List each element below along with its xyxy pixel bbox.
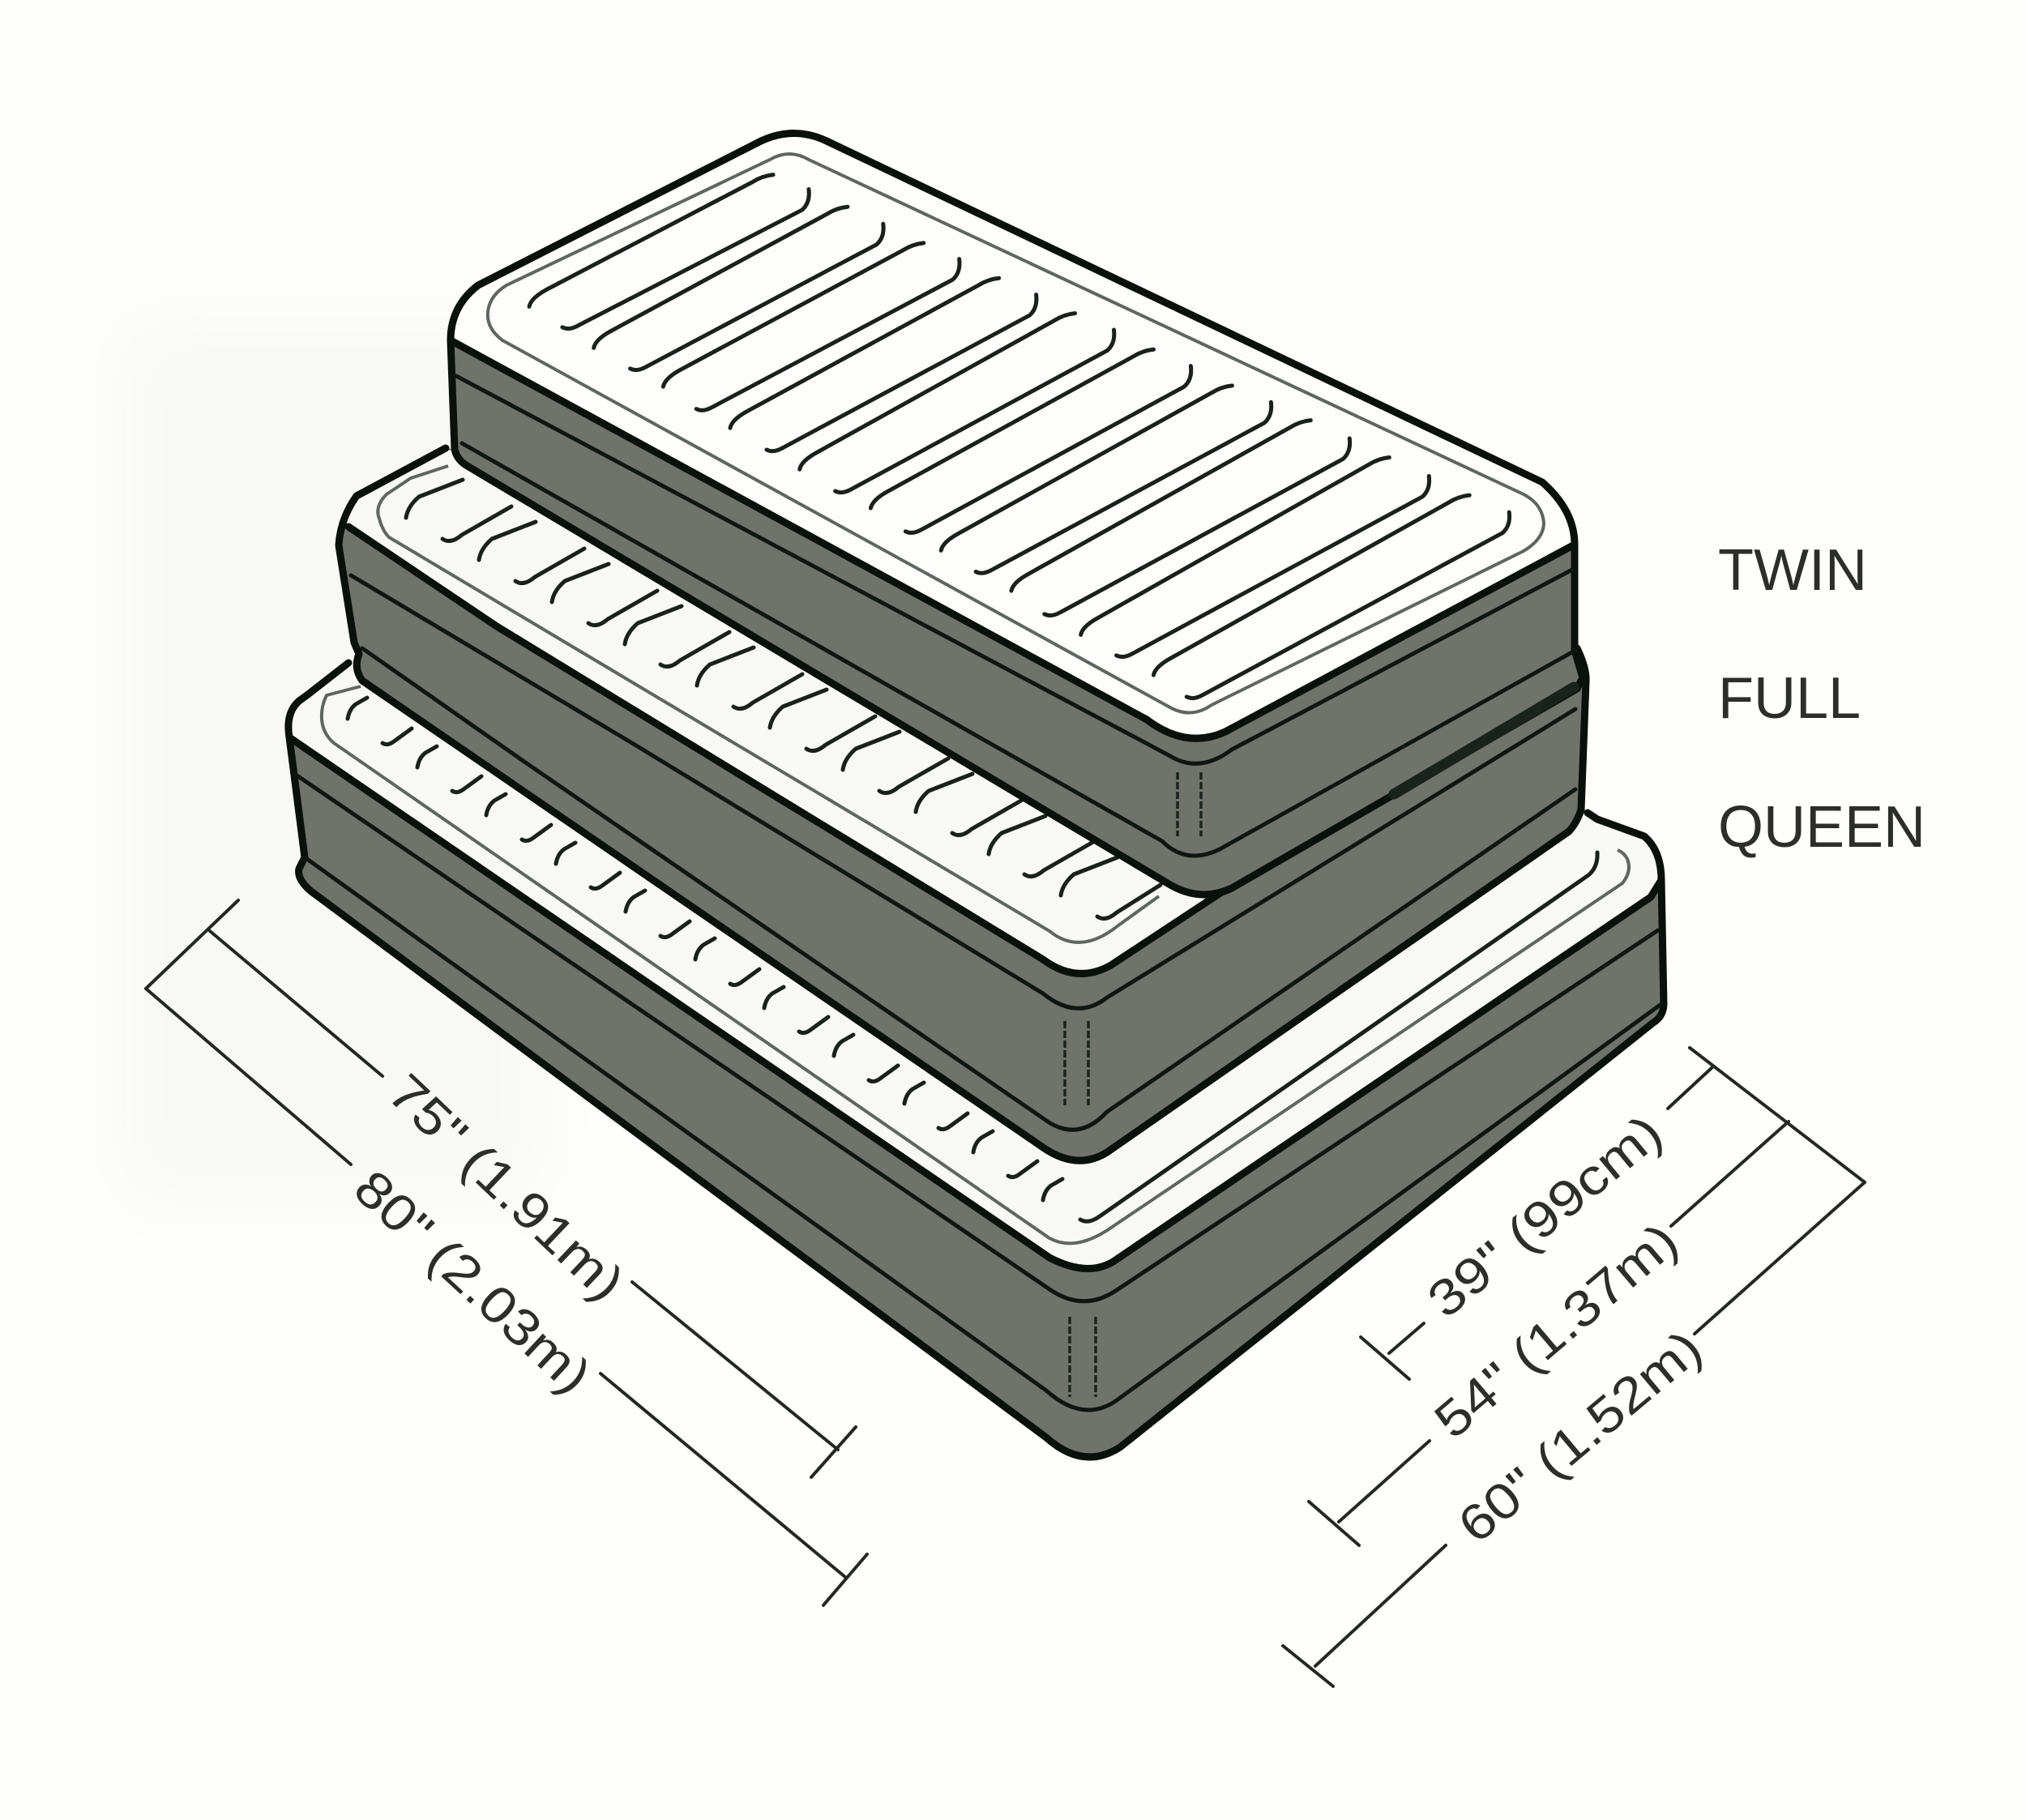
label: full: FULL — [1718, 666, 1861, 731]
queen stitching — [1070, 1317, 1096, 1397]
queen side wall — [289, 667, 1664, 1457]
full side wall — [339, 448, 1586, 1160]
full outlines — [339, 448, 1586, 1160]
queen inner border — [322, 686, 1629, 1243]
full stitching — [1065, 1021, 1088, 1105]
width dimension: 54 inches — [1309, 1121, 1789, 1545]
full seams — [351, 575, 1575, 1130]
queen outlines — [289, 663, 1664, 1457]
twin mattress — [451, 133, 1583, 895]
width dimension: 60 inches: 60" (1.52m) — [1448, 1320, 1712, 1554]
twin inner border — [488, 154, 1544, 713]
length dimension: 80 inches — [146, 989, 867, 1605]
length dimension: 80 inches: 80" (2.03m) — [343, 1160, 602, 1405]
twin ribs — [529, 175, 1510, 699]
twin stitching — [1178, 772, 1201, 836]
width dimension: 39 inches — [1361, 1048, 1865, 1379]
twin contact shadow — [1394, 687, 1574, 794]
width dimension: 54 inches: 54" (1.37m) — [1424, 1212, 1689, 1450]
size labels — [1718, 538, 1926, 860]
length dimension: 75 inches: 75" (1.91m) — [377, 1063, 635, 1312]
width dimension: 60 inches — [1283, 1182, 1865, 1686]
twin outlines — [451, 133, 1583, 895]
queen top face — [289, 663, 1661, 1269]
label: twin: TWIN — [1718, 538, 1867, 603]
full top face — [343, 448, 1571, 973]
queen ribs — [348, 698, 1597, 1221]
twin top face — [451, 133, 1575, 738]
width dimension: 39 inches: 39" (99cm) — [1417, 1104, 1673, 1329]
full mattress — [339, 448, 1586, 1160]
queen mattress — [289, 663, 1664, 1457]
queen seams — [296, 775, 1661, 1410]
label: queen: QUEEN — [1718, 795, 1926, 860]
length dimension: 75 inches — [146, 900, 856, 1477]
full ribs — [406, 480, 1160, 919]
twin seams — [456, 376, 1576, 856]
full inner border — [378, 466, 1159, 942]
twin side wall — [451, 340, 1576, 895]
